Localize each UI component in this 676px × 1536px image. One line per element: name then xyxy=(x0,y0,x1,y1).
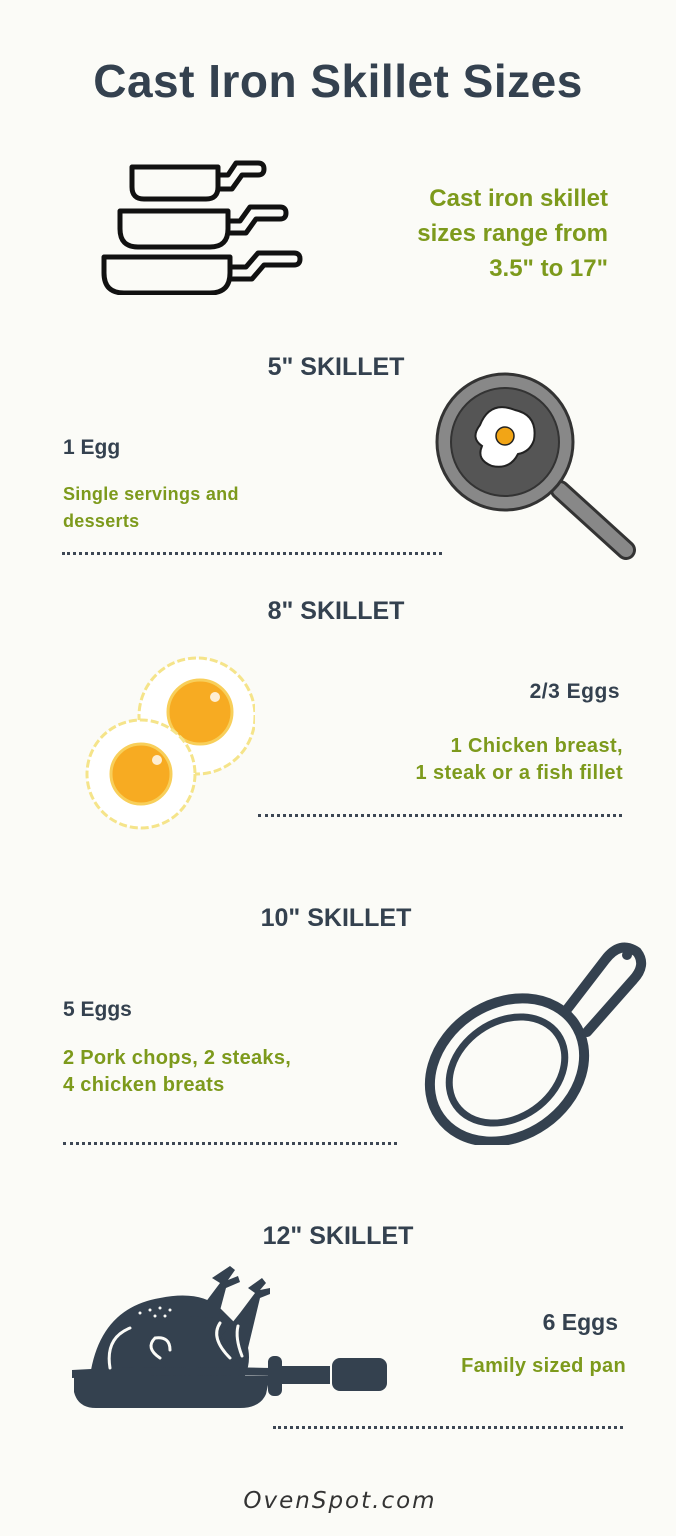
text: 5 eggs: 5 Eggs xyxy=(63,998,132,1021)
icon: roast chicken in pan xyxy=(72,1266,387,1408)
text: family sized pan: Family sized pan xyxy=(461,1355,626,1377)
text: pork chops: 2 Pork chops, 2 steaks, xyxy=(63,1047,291,1069)
text: single servings: Single servings and xyxy=(63,484,239,504)
heading: 8 inch: 8" SKILLET xyxy=(268,597,404,625)
heading: 10 inch: 10" SKILLET xyxy=(261,904,411,932)
title: Cast Iron Skillet Sizes xyxy=(93,55,583,107)
icon: egg in pan xyxy=(436,372,636,560)
text: single servings: desserts xyxy=(63,511,139,531)
heading: 5 inch: 5" SKILLET xyxy=(268,353,404,381)
icon: two fried eggs xyxy=(86,656,255,830)
text: single servings xyxy=(63,484,239,531)
footer: OvenSpot.com: OvenSpot.com xyxy=(243,1488,437,1514)
text: chicken breast: 1 Chicken breast, xyxy=(451,735,623,757)
text: chicken breast xyxy=(416,735,623,784)
icon: stacked skillets xyxy=(102,160,302,295)
tagline: sizes range from xyxy=(417,220,608,247)
text: 1 egg: 1 Egg xyxy=(63,436,120,459)
icon: outlined pan xyxy=(424,942,646,1145)
heading: 12 inch: 12" SKILLET xyxy=(263,1222,413,1250)
text: pork chops: 4 chicken breats xyxy=(63,1074,225,1096)
text: 6 eggs: 6 Eggs xyxy=(543,1309,618,1335)
text: chicken breast: 1 steak or a fish fillet xyxy=(416,762,623,784)
text: pork chops xyxy=(63,1047,291,1096)
tagline xyxy=(417,185,608,282)
tagline: 3.5" to 17" xyxy=(489,255,608,282)
tagline: Cast iron skillet xyxy=(429,185,608,212)
text: 2/3 eggs: 2/3 Eggs xyxy=(530,680,620,703)
